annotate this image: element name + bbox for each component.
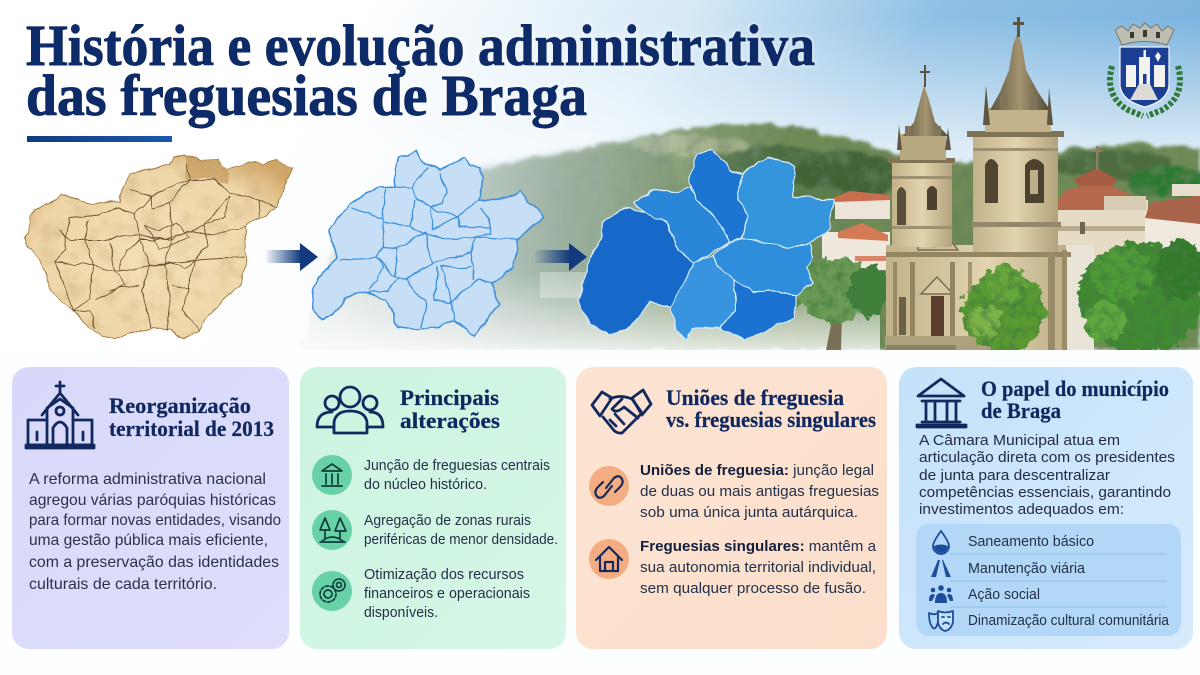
item: junção de freguesias: Junção de freguesias centrais xyxy=(364,458,550,474)
body text: de junta para descentralizar xyxy=(919,467,1110,484)
icon: people xyxy=(317,387,383,433)
heading: Uniões de freguesia xyxy=(666,385,844,410)
item: ação social: Ação social xyxy=(968,587,1040,603)
heading: territorial de 2013 xyxy=(109,416,274,441)
icon: municipal building xyxy=(917,379,966,427)
body text: culturais de cada território. xyxy=(29,576,217,593)
laurel left xyxy=(1110,66,1143,116)
arrow: old map to current map xyxy=(266,243,318,271)
item: saneamento xyxy=(933,531,1094,554)
tree left of the church xyxy=(795,258,888,350)
heading: Principais xyxy=(400,385,499,410)
item: otimização dos recursos: disponíveis. xyxy=(364,605,438,621)
item: agregação de zonas rurais: Agregação de zonas rurais xyxy=(364,513,531,529)
hero lower edge xyxy=(0,350,1200,368)
body text: A Câmara Municipal atua em xyxy=(919,432,1120,449)
body text: A reforma administrativa nacional xyxy=(29,471,266,488)
towers xyxy=(1126,50,1165,100)
title xyxy=(26,13,815,128)
heading: de Braga xyxy=(981,398,1061,423)
item: uniões de freguesia xyxy=(589,463,879,521)
tree in front of church xyxy=(962,264,1046,352)
body text xyxy=(29,471,281,593)
shield xyxy=(1120,47,1169,107)
crown xyxy=(1115,23,1174,45)
heading xyxy=(666,385,876,432)
item: freguesias singulares xyxy=(589,539,877,597)
region north-east xyxy=(738,157,833,248)
item: uniões de freguesia: de duas ou mais antigas freguesias xyxy=(640,484,879,500)
left tower xyxy=(888,65,955,247)
item: junção de freguesias xyxy=(312,455,550,495)
body text: com a preservação das identidades xyxy=(29,554,279,571)
investment list box xyxy=(916,524,1181,636)
item: otimização dos recursos: Otimização dos recursos xyxy=(364,567,524,583)
item: dinamização cultural: Dinamização cultural comunitária xyxy=(968,613,1170,629)
tree at far right xyxy=(1078,240,1200,354)
body text: investimentos adequados em: xyxy=(919,501,1124,518)
body text xyxy=(919,432,1175,518)
body text: articulação direta com os presidentes xyxy=(919,449,1175,466)
region east xyxy=(713,238,814,295)
panel: principais alterações xyxy=(300,367,566,649)
heading: Reorganização xyxy=(109,393,251,418)
item: ação social xyxy=(929,585,1040,603)
title rule xyxy=(27,136,172,142)
region south-east xyxy=(720,280,797,340)
item: uniões de freguesia: sob uma única junta autárquica. xyxy=(640,505,858,521)
body text: uma gestão pública mais eficiente, xyxy=(29,532,268,549)
right wing xyxy=(1058,146,1148,325)
far right building xyxy=(1145,184,1200,252)
town buildings behind the church xyxy=(540,191,890,298)
church xyxy=(885,17,1200,350)
item: junção de freguesias: do núcleo histórico. xyxy=(364,477,487,493)
region north-west xyxy=(633,187,730,263)
map: merged parishes in saturated blue xyxy=(578,150,833,340)
heading: O papel do município xyxy=(981,376,1169,401)
hero landscape background xyxy=(309,0,1200,350)
heading xyxy=(981,376,1169,423)
item: manutenção viária: Manutenção viária xyxy=(968,561,1086,577)
region west xyxy=(578,208,694,335)
item: saneamento: Saneamento básico xyxy=(968,534,1094,550)
title: História e evolução administrativa xyxy=(26,13,815,78)
item: otimização dos recursos: financeiros e operacionais xyxy=(364,586,530,602)
central facade xyxy=(885,212,1094,350)
item: uniões de freguesia: Uniões de freguesia: junção legal xyxy=(640,463,874,479)
arrow: current map to merged map xyxy=(535,243,587,271)
region north xyxy=(690,150,749,242)
heading xyxy=(109,393,274,441)
panel: uniões de freguesia vs. singulares xyxy=(576,367,887,649)
right tower xyxy=(967,17,1064,252)
map: parchment historic map xyxy=(23,156,293,339)
item: freguesias singulares: sua autonomia territorial individual, xyxy=(640,560,876,576)
panel: o papel do município xyxy=(899,367,1193,649)
icon: coat of arms of Braga xyxy=(1110,23,1180,116)
heading xyxy=(400,385,500,433)
item: freguesias singulares: Freguesias singulares: mantêm a xyxy=(640,539,877,555)
item: dinamização cultural xyxy=(929,611,1170,631)
region south xyxy=(671,255,735,340)
body text: agregou várias paróquias históricas xyxy=(29,492,276,509)
heading: vs. freguesias singulares xyxy=(666,407,876,432)
item: agregação de zonas rurais: periféricas de menor densidade. xyxy=(364,532,558,548)
laurel right xyxy=(1147,66,1180,116)
panel: reorganização territorial xyxy=(12,367,289,649)
icon: church xyxy=(26,382,94,448)
body text: para formar novas entidades, visando xyxy=(29,512,281,529)
item: agregação de zonas rurais xyxy=(312,510,558,550)
body text: competências essenciais, garantindo xyxy=(919,484,1171,501)
icon: handshake xyxy=(592,390,651,433)
map: pale blue map with many parishes xyxy=(312,150,543,337)
item: freguesias singulares: sem qualquer processo de fusão. xyxy=(640,581,866,597)
item: otimização dos recursos xyxy=(312,567,530,621)
heading: alterações xyxy=(400,408,500,433)
title: das freguesias de Braga xyxy=(26,63,587,128)
